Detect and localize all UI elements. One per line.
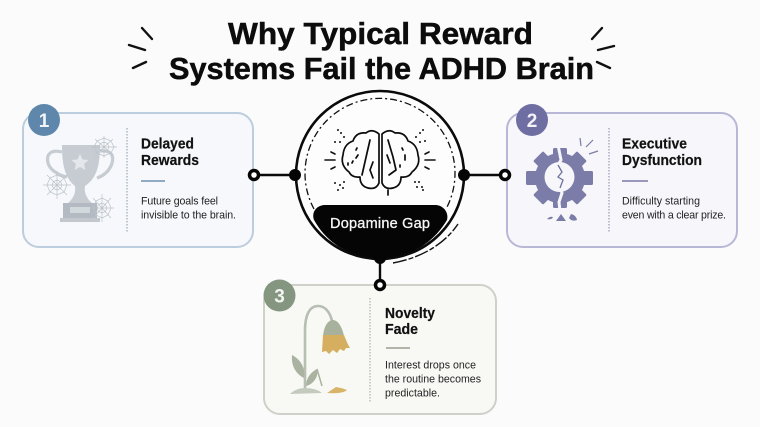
outer dashed arc [393,224,458,263]
icon: right title rays [592,28,614,68]
panel: delayed rewards [23,104,253,247]
dopamine gap banner: Dopamine Gap [330,216,430,232]
badge 3: 3 [274,286,285,308]
icon: trophy with cobwebs [43,136,117,222]
dopamine gap banner [313,205,447,258]
text block: even with a clear prize. [622,210,726,222]
heading [622,136,702,169]
title [169,16,594,86]
badge 3 [264,280,296,312]
title: Why Typical Reward [228,16,533,51]
heading: Dysfunction [622,153,702,169]
icon: brain sparks [325,129,435,191]
heading [141,136,199,169]
badge 1 [28,104,60,136]
connector lines [254,175,505,285]
heading: Rewards [141,153,199,169]
heading [385,306,435,338]
badge 2: 2 [527,111,537,132]
panel: executive dysfunction [507,104,737,247]
divider [126,128,128,232]
heading: Novelty [385,306,435,322]
heading: Executive [622,136,687,152]
divider [369,298,371,402]
text block [622,196,726,222]
text block: the routine becomes [385,374,481,386]
connector nodes [250,169,510,290]
text block [141,196,236,222]
text block [385,360,481,400]
heading: Fade [385,322,418,338]
title: Systems Fail the ADHD Brain [169,51,594,86]
text block: predictable. [385,388,440,400]
divider [608,128,610,232]
heading: Delayed [141,136,194,152]
text block: Future goals feel [141,196,218,208]
badge 2 [516,104,548,136]
badge 1: 1 [39,111,50,132]
icon: left title rays [129,28,152,68]
text block: invisible to the brain. [141,210,236,222]
text block: Interest drops once [385,360,476,372]
icon: wilted flower [290,306,350,394]
text block: Difficulty starting [622,196,700,208]
icon: cracked gear [526,138,598,221]
icon: brain [342,131,419,195]
central dopamine circle [296,91,464,259]
panel: novelty fade [264,280,496,414]
